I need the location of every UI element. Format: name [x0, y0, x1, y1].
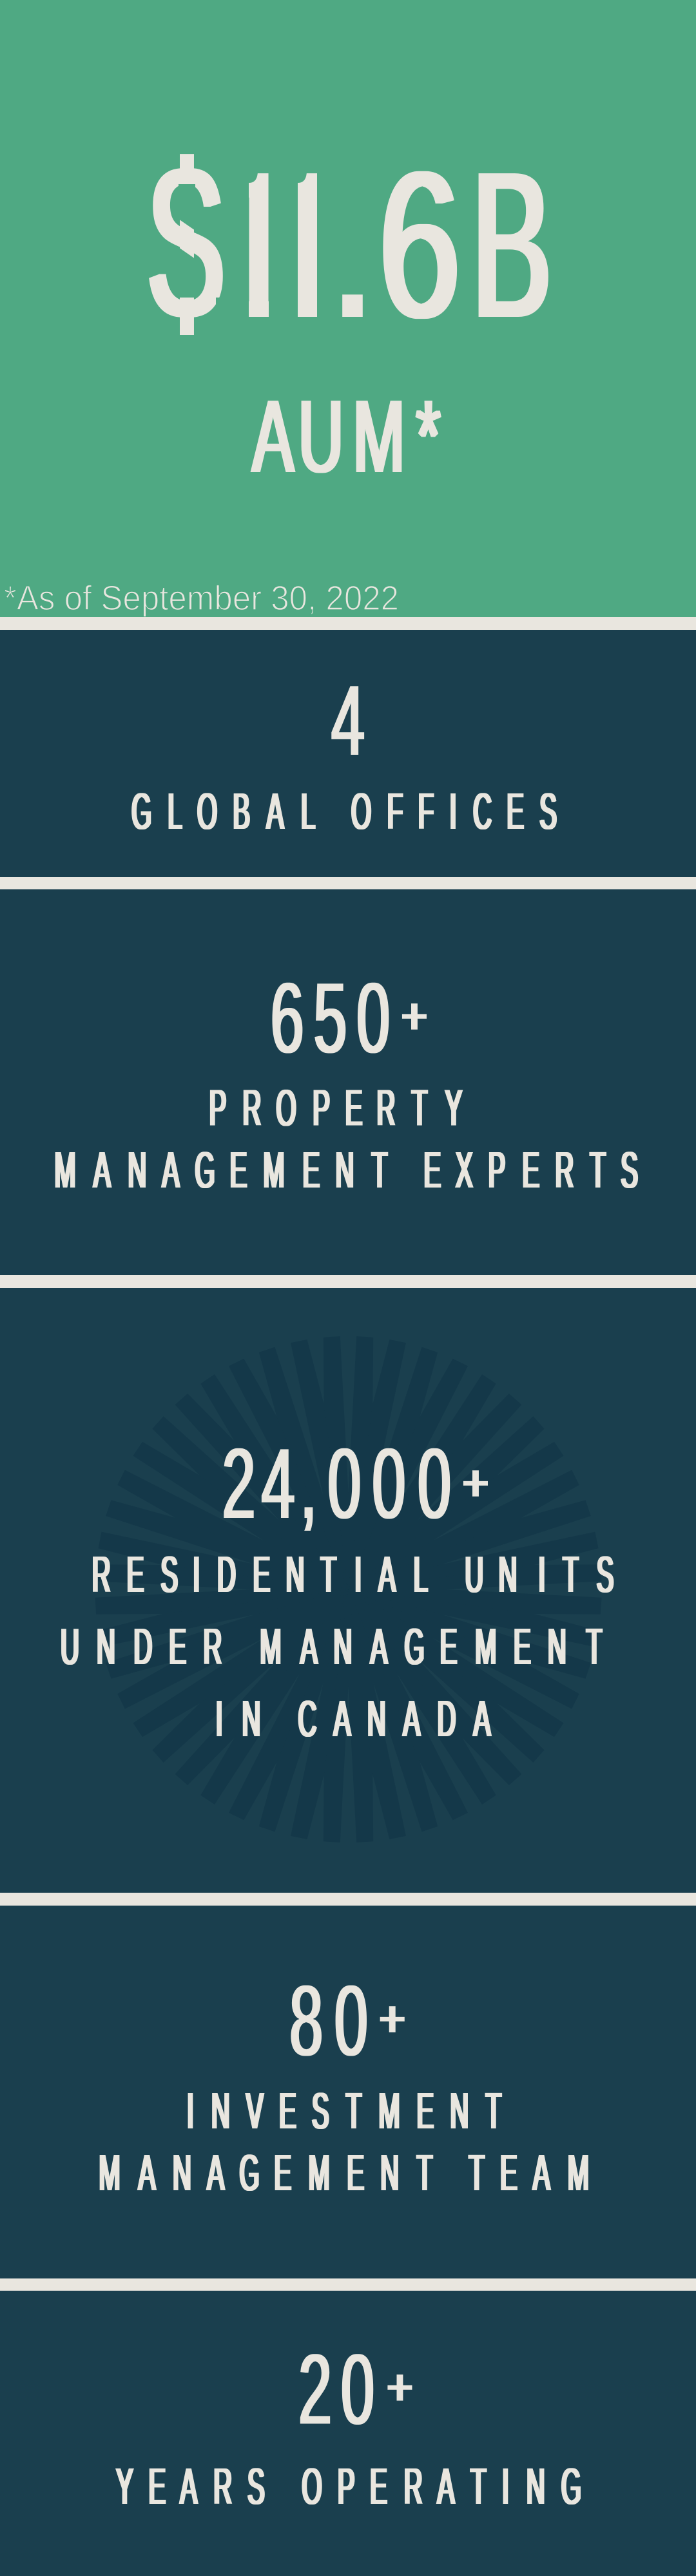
panel: assets under management [0, 0, 696, 618]
panel: investment management team [0, 1906, 696, 2278]
number: 80+ [289, 1965, 405, 2077]
headline figure: $11.6B: $ [151, 117, 222, 367]
label: property management experts: PROPERTY [209, 1080, 462, 1137]
number: 80+: 80 [289, 1965, 368, 2077]
number: 24,000+: 24,000 [222, 1428, 451, 1540]
panel: property management experts [0, 889, 696, 1275]
number: 20+: + [387, 2358, 412, 2416]
label: property management experts [54, 1080, 638, 1199]
headline figure: $11.6B: B [472, 128, 552, 361]
label: investment management team: INVESTMENT [187, 2083, 501, 2140]
number: 4: 4 [331, 665, 365, 777]
number: 80+: + [380, 1990, 405, 2047]
label: residential units under management in Canada [61, 1546, 614, 1748]
icon: sunburst [95, 1336, 602, 1842]
label: residential units under management in Canada: RESIDENTIAL UNITS [92, 1546, 614, 1604]
number: 650+: + [401, 987, 427, 1045]
headline figure: $11.6B: 11.6 [215, 129, 460, 362]
label: investment management team: MANAGEMENT TEAM [99, 2145, 589, 2202]
number: 20+ [298, 2334, 412, 2445]
label: investment management team [99, 2083, 589, 2202]
footnote: date: *As of September 30, 2022 [4, 579, 399, 618]
number: 24,000+: + [463, 1454, 488, 1511]
panel: residential units [0, 1288, 696, 1893]
number: 650+: 650 [271, 963, 390, 1074]
label: property management experts: MANAGEMENT EXPERTS [54, 1142, 638, 1199]
panel: global offices [0, 630, 696, 877]
label: residential units under management in Canada: UNDER MANAGEMENT [61, 1618, 602, 1676]
panel: years operating [0, 2291, 696, 2576]
label: AUM*: AUM* [252, 379, 440, 495]
number: 20+: 20 [298, 2334, 374, 2445]
label: global offices: GLOBAL OFFICES [131, 783, 557, 840]
headline figure: $11.6B [151, 117, 552, 367]
label: years operating: YEARS OPERATING [116, 2458, 581, 2515]
label: residential units under management in Canada: IN CANADA [216, 1690, 491, 1748]
